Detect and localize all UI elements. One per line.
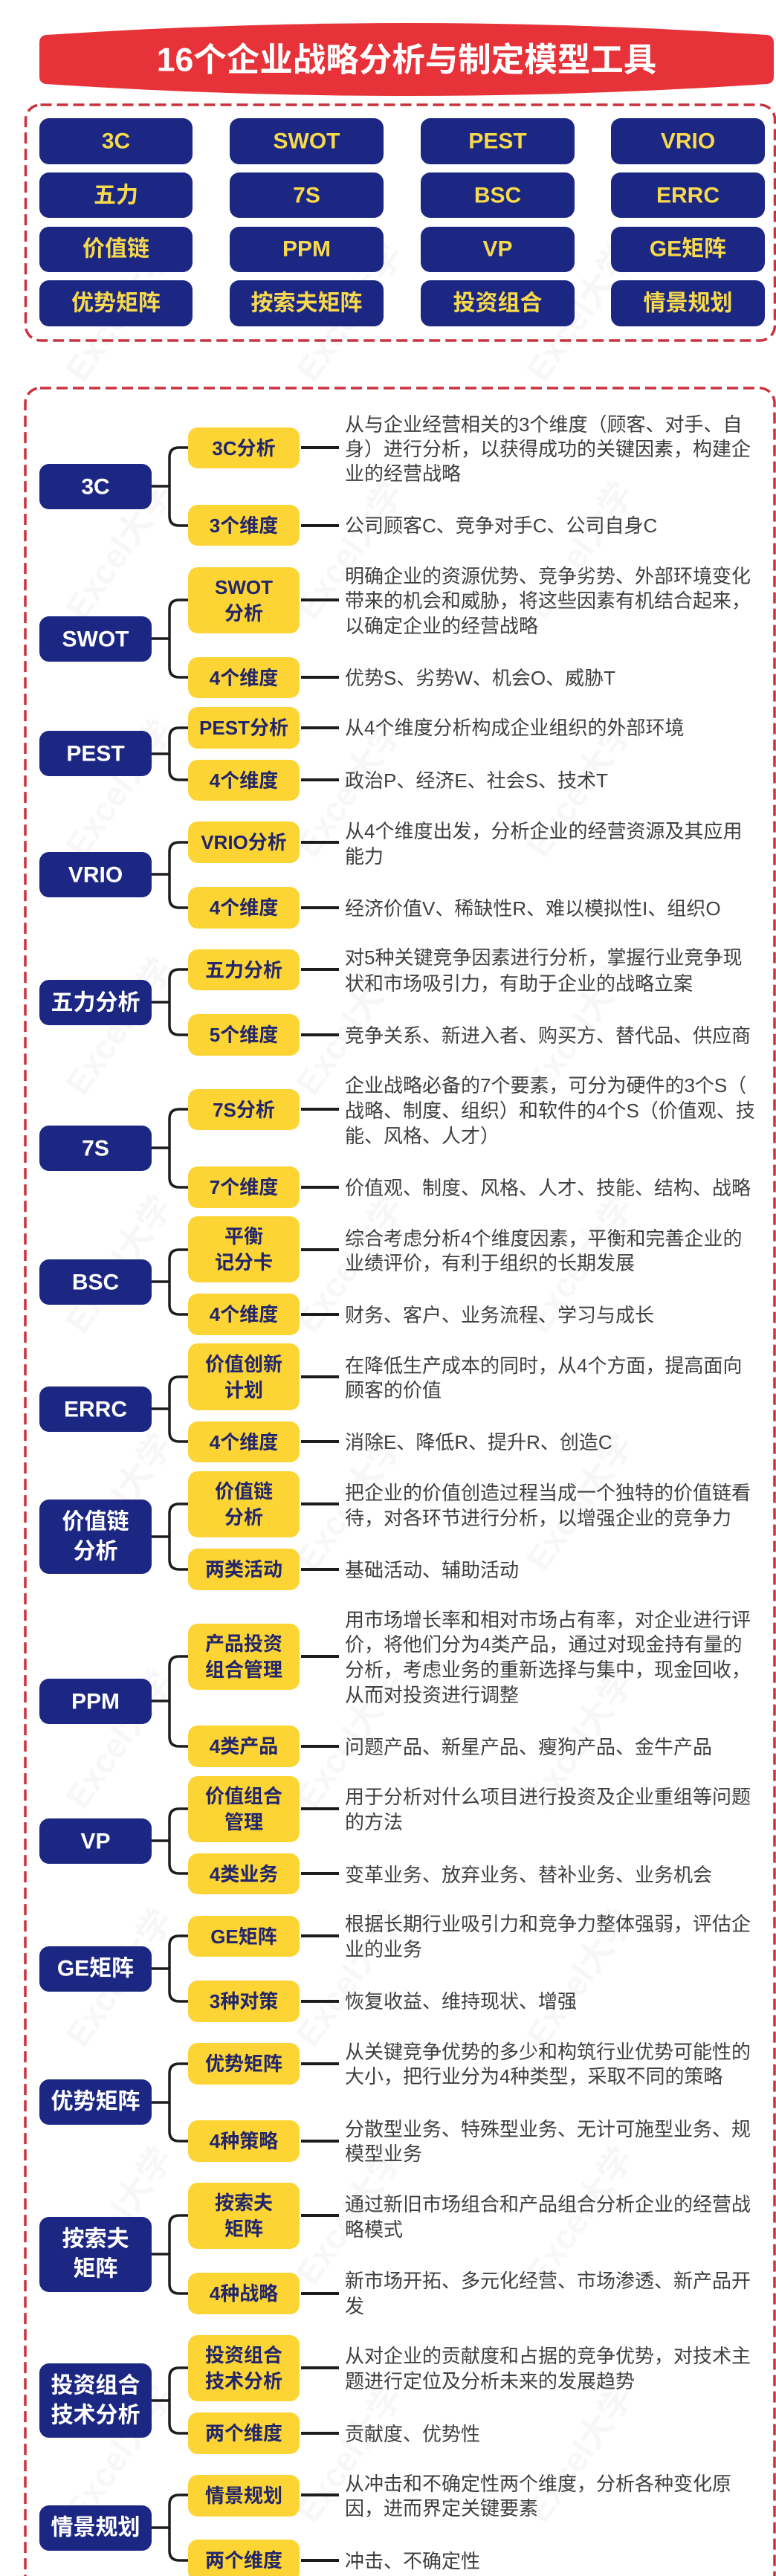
description: 4个维度: 消除E、降低R、提升R、创造C [345,1431,612,1453]
description: 价值组合管理: 用于分析对什么项目进行投资及企业重组等问题 [345,1786,751,1808]
node: 3C: 3C [81,474,110,500]
sub node: SWOT分析 [188,567,300,633]
line [301,2366,339,2369]
watermark pattern: Excel大学 [519,712,641,864]
description: 3个维度: 公司顾客C、竞争对手C、公司自身C [345,514,657,537]
sub node: 4个维度: 4个维度 [210,769,278,792]
watermark pattern: Excel大学 [288,950,410,1102]
description: 4个维度: 财务、客户、业务流程、学习与成长 [345,1304,654,1326]
description: 7S分析: 战略、制度、组织）和软件的4个S（价值观、技 [345,1100,755,1122]
sub node: 五力分析 [188,949,300,990]
line [301,778,339,781]
index button: 优势矩阵 [39,280,193,326]
description: 两个维度: 冲击、不确定性 [345,2550,480,2572]
watermark pattern: Excel大学 [519,1426,641,1578]
description: 价值创新计划: 在降低生产成本的同时，从4个方面，提高面向 [345,1355,742,1377]
model: 3C [39,413,751,546]
sub node: 3C分析 [188,427,300,468]
node: PEST: PEST [66,742,125,766]
description: PEST分析: 从4个维度分析构成企业组织的外部环境 [345,717,684,739]
description: 按索夫矩阵: 通过新旧市场组合和产品组合分析企业的经营战 [345,2193,751,2215]
description: 7S分析: 企业战略必备的7个要素，可分为硬件的3个S（ [345,1074,746,1097]
description: 优势矩阵: 从关键竞争优势的多少和构筑行业优势可能性的 [345,2041,751,2063]
description: VRIO分析: 从4个维度出发，分析企业的经营资源及其应用 [345,820,742,842]
index button: 五力 [39,172,193,218]
description: 4类产品: 问题产品、新星产品、瘦狗产品、金牛产品 [345,1736,712,1758]
line [301,2214,339,2217]
watermark pattern: Excel大学 [519,950,641,1102]
node: VRIO: VRIO [68,862,123,888]
sub node: 价值链分析: 价值链 [215,1480,273,1502]
sub node: SWOT分析: SWOT [215,576,273,598]
description: 4种战略: 新市场开拓、多元化经营、市场渗透、新产品开 [345,2270,751,2292]
connector: BSC [152,1250,188,1314]
sub node: 4个维度 [188,1294,300,1335]
line [301,1934,339,1937]
sub node: 5个维度: 5个维度 [210,1024,278,1046]
index button: 3C: 3C [102,129,130,153]
description: GE矩阵: 根据长期行业吸引力和竞争力整体强弱，评估企 [345,1913,751,1935]
description: 优势矩阵: 大小，把行业分为4种类型，采取不同的策略 [345,2065,722,2088]
index button: 投资组合: 投资组合 [453,291,543,315]
watermark pattern: Excel大学 [58,950,180,1102]
line [301,1033,339,1036]
description: SWOT分析: 明确企业的资源优势、竞争劣势、外部环境变化 [345,565,751,587]
node: 价值链分析 [39,1500,152,1574]
connector: 优势矩阵 [152,2064,188,2141]
sub node: 5个维度 [188,1014,300,1056]
sub node: 情景规划: 情景规划 [205,2485,282,2507]
sub node: 3种对策: 3种对策 [210,1990,278,2012]
sub node: 两个维度: 两个维度 [205,2549,282,2572]
index button: 投资组合 [421,280,575,326]
watermark pattern: Excel大学 [288,474,410,626]
sub node: 3种对策 [188,1981,300,2022]
sub node: 4个维度: 4个维度 [210,1303,278,1326]
description: 情景规划: 因，进而界定关键要素 [345,2497,538,2519]
sub node: GE矩阵: GE矩阵 [210,1925,277,1948]
description: SWOT分析: 以确定企业的经营战略 [345,615,538,637]
description: 两个维度: 贡献度、优势性 [345,2423,480,2445]
description: 产品投资组合管理: 用市场增长率和相对市场占有率，对企业进行评 [345,1609,751,1631]
description: 五力分析: 状和市场吸引力，有助于企业的战略立案 [345,972,693,995]
index button: PEST: PEST [468,129,527,153]
line [301,2062,339,2065]
node: 价值链分析: 价值链 [62,1509,129,1534]
sub node: 7S分析: 7S分析 [213,1099,275,1121]
connector: PPM [152,1656,188,1746]
index button: 优势矩阵: 优势矩阵 [71,291,161,315]
watermark pattern: Excel大学 [519,1902,641,2053]
index button: SWOT [230,118,384,164]
line [301,2559,339,2562]
sub node: 价值组合管理 [188,1776,300,1842]
watermark pattern: Excel大学 [58,712,180,864]
sub node: GE矩阵 [188,1916,300,1957]
node: GE矩阵: GE矩阵 [57,1957,134,1981]
watermark pattern: Excel大学 [519,236,641,388]
sub node: 4种策略: 4种策略 [210,2130,278,2152]
sub node: 两类活动: 两类活动 [205,1558,282,1581]
index button: 7S [230,172,384,218]
watermark pattern: Excel大学 [58,1426,180,1578]
description: 7个维度: 价值观、制度、风格、人才、技能、结构、战略 [345,1177,751,1199]
index button: 3C [39,118,193,164]
sub node: 产品投资组合管理 [188,1624,300,1690]
sub node: 4个维度: 4个维度 [210,897,278,919]
index button: ERRC [611,172,765,218]
sub node: 价值创新计划: 计划 [224,1379,263,1401]
sub node: 4个维度 [188,887,300,929]
connector: 投资组合技术分析 [152,2368,188,2433]
description: 价值组合管理: 的方法 [345,1811,403,1833]
sub node: 4类业务 [188,1853,300,1894]
description: GE矩阵: 业的业务 [345,1938,422,1960]
index button: BSC: BSC [474,183,521,208]
index button: VRIO [611,118,765,164]
index button: 五力: 五力 [94,183,138,208]
model: ERRC [39,1343,742,1462]
model: VP [39,1776,751,1894]
connector: ERRC [152,1377,188,1442]
line [301,1313,339,1316]
watermark pattern: Excel大学 [288,2140,410,2291]
sub node: 按索夫矩阵 [188,2183,300,2249]
line [301,726,339,729]
line [301,1502,339,1505]
connector: 3C [152,448,188,526]
index button: ERRC: ERRC [656,183,720,208]
description: 投资组合技术分析: 题进行定位及分析未来的发展趋势 [345,2370,635,2392]
model: PEST [39,707,684,801]
sub node: 产品投资组合管理: 组合管理 [205,1659,282,1681]
watermark pattern: Excel大学 [288,2378,410,2529]
line [301,2292,339,2295]
description: 4个维度: 政治P、经济E、社会S、技术T [345,769,608,792]
connector: GE矩阵 [152,1936,188,2001]
description: 平衡记分卡: 综合考虑分析4个维度因素，平衡和完善企业的 [345,1227,742,1250]
model: 价值链分析 [39,1471,751,1590]
model: GE矩阵 [39,1913,751,2022]
title banner: 16个企业战略分析与制定模型工具 [157,42,656,79]
line [301,968,339,971]
node: 价值链分析: 分析 [73,1539,117,1564]
node: SWOT: SWOT [62,627,129,651]
node: 7S [39,1126,152,1171]
sub node: 3个维度: 3个维度 [210,514,278,537]
model: 五力分析 [39,946,751,1056]
line [301,446,339,449]
node: 优势矩阵: 优势矩阵 [51,2089,140,2114]
connector: VP [152,1809,188,1873]
sub node: 五力分析: 五力分析 [205,959,282,981]
title banner [39,23,774,96]
description: 4个维度: 经济价值V、稀缺性R、难以模拟性I、组织O [345,897,721,920]
description: 3C分析: 身）进行分析，以获得成功的关键因素，构建企 [345,438,751,460]
sub node: 优势矩阵: 优势矩阵 [205,2053,282,2075]
watermark pattern: Excel大学 [519,474,641,626]
line [301,1108,339,1111]
sub node: 两类活动 [188,1549,300,1590]
sub node: 平衡记分卡: 记分卡 [215,1251,273,1274]
connector: PEST [152,728,188,780]
model: VRIO [39,820,742,929]
node: PPM: PPM [71,1689,120,1714]
line [301,1872,339,1875]
description: 两类活动: 基础活动、辅助活动 [345,1559,519,1581]
description: SWOT分析: 带来的机会和威胁，将这些因素有机结合起来， [345,590,751,612]
node: 按索夫矩阵 [39,2217,152,2292]
watermark pattern: Excel大学 [58,2140,180,2291]
sub node: 投资组合技术分析: 技术分析 [205,2370,282,2392]
index button: PEST [421,118,575,164]
watermark pattern: Excel大学 [58,1664,180,1815]
line [301,1568,339,1571]
node: VRIO [39,852,152,897]
sub node: 价值创新计划 [188,1343,300,1410]
description: 3C分析: 业的经营战略 [345,462,461,485]
watermark pattern: Excel大学 [58,1188,180,1340]
node: 3C [39,464,152,509]
index button: BSC [421,172,575,218]
description: 产品投资组合管理: 价，将他们分为4类产品，通过对现金持有量的 [345,1633,742,1656]
watermark pattern: Excel大学 [58,474,180,626]
node: ERRC [39,1387,152,1432]
node: 投资组合技术分析: 技术分析 [51,2403,140,2428]
description: 5个维度: 竞争关系、新进入者、购买方、替代品、供应商 [345,1024,751,1047]
sub node: 价值组合管理: 价值组合 [205,1785,282,1807]
sub node: 4类产品: 4类产品 [210,1735,278,1757]
model: 情景规划 [39,2473,731,2576]
watermark pattern: Excel大学 [288,236,410,388]
watermark pattern: Excel大学 [288,712,410,864]
node: 7S: 7S [82,1136,109,1161]
connector: 7S [152,1109,188,1187]
sub node: 4个维度 [188,1421,300,1462]
index button: GE矩阵 [611,227,765,272]
node: 情景规划 [39,2505,152,2551]
node: VP: VP [80,1829,111,1854]
index button: PPM [230,227,384,272]
sub node: 投资组合技术分析: 投资组合 [205,2344,282,2366]
node: 五力分析 [39,980,152,1025]
line [301,1186,339,1189]
index button: VRIO: VRIO [661,129,715,153]
node: 按索夫矩阵: 矩阵 [73,2257,117,2281]
watermark pattern: Excel大学 [519,1664,641,1815]
sub node: 投资组合技术分析 [188,2335,300,2401]
node: GE矩阵 [39,1946,152,1992]
description: 平衡记分卡: 业绩评价，有利于组织的长期发展 [345,1252,635,1274]
sub node: 优势矩阵 [188,2043,300,2085]
sub node: PEST分析 [188,707,300,749]
description: VRIO分析: 能力 [345,845,384,868]
sub node: 按索夫矩阵: 矩阵 [224,2218,263,2240]
sub node: 平衡记分卡: 平衡 [224,1225,263,1247]
sub node: 两个维度 [188,2412,300,2454]
line [301,2140,339,2143]
connector: 价值链分析 [152,1504,188,1569]
line [301,906,339,909]
index button: 情景规划: 情景规划 [644,291,733,315]
connector: 情景规划 [152,2495,188,2560]
description: 情景规划: 从冲击和不确定性两个维度，分析各种变化原 [345,2473,731,2495]
line [301,1375,339,1378]
line [301,524,339,527]
model: SWOT [39,565,751,698]
node: VP [39,1818,152,1864]
line [301,676,339,679]
sub node: 3个维度 [188,505,300,546]
sub node: 价值创新计划: 价值创新 [205,1353,282,1375]
description: 按索夫矩阵: 略模式 [345,2218,403,2241]
description: 4种策略: 分散型业务、特殊型业务、无计可施型业务、规 [345,2118,751,2140]
node: ERRC: ERRC [64,1398,127,1421]
sub node: VRIO分析: VRIO分析 [201,831,287,853]
node: 按索夫矩阵: 按索夫 [62,2227,129,2251]
description: 产品投资组合管理: 从而对投资进行调整 [345,1684,519,1706]
model: 7S [39,1074,755,1208]
line [301,1655,339,1658]
sub node: 4个维度: 4个维度 [210,667,278,689]
description: 4个维度: 优势S、劣势W、机会O、威胁T [345,667,615,689]
node: PEST [39,731,152,776]
watermark pattern: Excel大学 [288,1902,410,2053]
index button: PPM: PPM [282,236,331,262]
description: 价值链分析: 待，对各环节进行分析，以增强企业的竞争力 [345,1507,731,1529]
index button: VP [421,227,575,272]
sub node: 价值链分析 [188,1471,300,1537]
watermark pattern: Excel大学 [58,236,180,388]
sub node: 两个维度: 两个维度 [205,2422,282,2444]
index button: 价值链 [39,227,193,272]
index button: SWOT: SWOT [274,129,340,153]
watermark pattern [58,236,641,2529]
index button: 7S: 7S [293,183,320,208]
sub node: 4个维度 [188,760,300,801]
watermark pattern: Excel大学 [519,2140,641,2291]
connector: 五力分析 [152,969,188,1035]
watermark pattern: Excel大学 [288,1188,410,1340]
index button: GE矩阵: GE矩阵 [650,236,726,262]
line [301,2493,339,2496]
node: 投资组合技术分析 [39,2363,152,2438]
description: 产品投资组合管理: 分析，考虑业务的重新选择与集中，现金回收， [345,1659,751,1681]
description: 4种策略: 模型业务 [345,2143,422,2165]
connector: SWOT [152,600,188,677]
model: BSC [39,1216,742,1335]
description: 4种战略: 发 [345,2295,364,2317]
line [301,841,339,844]
sub node: VRIO分析 [188,821,300,863]
index button: VP: VP [482,236,513,262]
sub node: 4种战略 [188,2273,300,2314]
node: BSC [39,1259,152,1305]
sub node: 4种策略 [188,2120,300,2162]
description: 价值链分析: 把企业的价值创造过程当成一个独特的价值链看 [345,1482,751,1504]
sub node: 两个维度 [188,2540,300,2576]
panel: model index [25,105,775,340]
line [301,1440,339,1443]
node: 优势矩阵 [39,2079,152,2125]
sub node: 价值组合管理: 管理 [224,1811,263,1833]
index button: 按索夫矩阵 [230,280,384,326]
description: 投资组合技术分析: 从对企业的贡献度和占据的竞争优势，对技术主 [345,2345,751,2367]
line [301,2000,339,2003]
description: 7S分析: 能、风格、人才） [345,1125,499,1147]
line [301,1248,339,1251]
sub node: 3C分析: 3C分析 [212,437,276,459]
sub node: 情景规划 [188,2475,300,2517]
index button: 按索夫矩阵: 按索夫矩阵 [251,291,363,315]
watermark pattern: Excel大学 [58,1902,180,2053]
sub node: 7个维度: 7个维度 [210,1176,278,1198]
model: PPM [39,1609,751,1767]
node: PPM [39,1679,152,1724]
model: 按索夫矩阵 [39,2183,751,2317]
sub node: 按索夫矩阵: 按索夫 [215,2192,273,2214]
node: SWOT [39,616,152,662]
description: 价值创新计划: 顾客的价值 [345,1379,442,1401]
node: 投资组合技术分析: 投资组合 [51,2373,140,2398]
watermark pattern: Excel大学 [519,1188,641,1340]
watermark pattern: Excel大学 [288,1664,410,1815]
sub node: SWOT分析: 分析 [224,602,263,624]
description: 五力分析: 对5种关键竞争因素进行分析，掌握行业竞争现 [345,946,742,969]
line [301,1745,339,1748]
index button: 价值链: 价值链 [83,236,149,262]
sub node: 4个维度 [188,657,300,698]
description: 3C分析: 从与企业经营相关的3个维度（顾客、对手、自 [345,413,742,436]
line [301,2432,339,2435]
line [301,1807,339,1810]
model: 投资组合技术分析 [39,2335,751,2454]
watermark pattern: Excel大学 [519,2378,641,2529]
node: 情景规划: 情景规划 [51,2516,140,2540]
sub node: 4类产品 [188,1726,300,1767]
sub node: 4种战略: 4种战略 [210,2282,278,2305]
connector: 按索夫矩阵 [152,2215,188,2293]
sub node: PEST分析: PEST分析 [199,717,288,739]
sub node: 4个维度: 4个维度 [210,1431,278,1453]
sub node: 平衡记分卡 [188,1216,300,1282]
sub node: 4类业务: 4类业务 [210,1863,278,1885]
node: 五力分析: 五力分析 [51,990,140,1016]
watermark pattern: Excel大学 [58,2378,180,2529]
sub node: 7个维度 [188,1166,300,1208]
node: BSC: BSC [72,1270,119,1295]
line [301,598,339,601]
sub node: 产品投资组合管理: 产品投资 [205,1633,282,1655]
sub node: 7S分析 [188,1089,300,1130]
index button: 情景规划 [611,280,765,326]
connector: VRIO [152,842,188,908]
model: 优势矩阵 [39,2041,751,2165]
description: 4类业务: 变革业务、放弃业务、替补业务、业务机会 [345,1864,712,1886]
watermark pattern: Excel大学 [288,1426,410,1578]
description: 3种对策: 恢复收益、维持现状、增强 [345,1990,577,2012]
sub node: 价值链分析: 分析 [224,1506,263,1529]
